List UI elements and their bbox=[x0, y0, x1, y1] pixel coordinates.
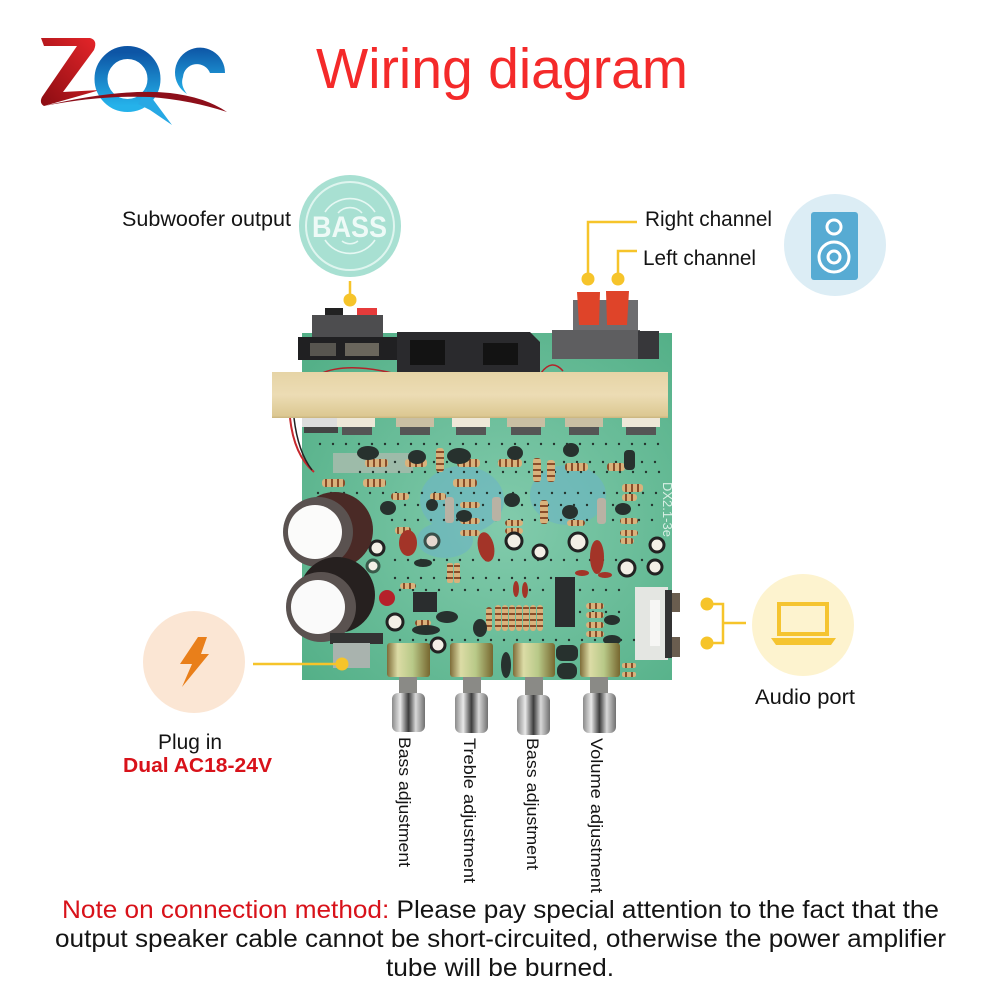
label: audio port: Audio port bbox=[755, 685, 855, 709]
label: bass adjustment 2: Bass adjustment bbox=[523, 738, 542, 870]
resistors bbox=[322, 459, 643, 677]
red film capacitors bbox=[379, 530, 612, 606]
icon: speaker bbox=[784, 194, 886, 296]
right terminal bbox=[552, 291, 659, 359]
potentiometers bbox=[387, 643, 620, 677]
board marking: DX2.1-3e bbox=[660, 482, 675, 537]
icon: bass circle: BASS bbox=[312, 211, 387, 244]
label: right channel: Right channel bbox=[645, 207, 772, 231]
icon: lightning bbox=[143, 611, 245, 713]
power socket bbox=[330, 633, 383, 668]
connector: audio port bbox=[700, 598, 746, 650]
fan bbox=[397, 332, 540, 372]
solder dots bbox=[318, 444, 660, 640]
wires bbox=[290, 365, 563, 472]
small transistors bbox=[357, 443, 635, 679]
connector: left channel bbox=[612, 251, 637, 286]
note text bbox=[55, 896, 946, 982]
subwoofer terminal bbox=[298, 308, 397, 360]
transistors bbox=[302, 418, 660, 435]
label: volume adjustment: Volume adjustment bbox=[587, 738, 606, 893]
small capacitors bbox=[367, 533, 664, 652]
blue zones bbox=[417, 465, 606, 558]
label: left channel: Left channel bbox=[643, 246, 756, 270]
label: treble adjustment: Treble adjustment bbox=[460, 738, 479, 883]
label: plug in: Plug in bbox=[158, 730, 222, 754]
note text: Note on connection method: Please pay special attention to the fact that the bbox=[62, 896, 939, 924]
label: subwoofer output: Subwoofer output bbox=[122, 207, 291, 231]
icon: bass circle bbox=[299, 175, 401, 277]
connector: right channel bbox=[582, 222, 637, 286]
connector: subwoofer bbox=[344, 281, 356, 306]
silkscreen patch bbox=[333, 453, 413, 473]
connector: power bbox=[253, 658, 348, 670]
label: dual AC: Dual AC18-24V bbox=[123, 754, 272, 777]
amplifier board bbox=[272, 291, 680, 735]
chips bbox=[413, 577, 575, 627]
large capacitors bbox=[283, 492, 375, 642]
note text: output speaker cable cannot be short-circuited, otherwise the power amplifier bbox=[55, 925, 946, 953]
icon: laptop bbox=[752, 574, 854, 676]
knobs bbox=[392, 677, 616, 735]
heatsink bbox=[272, 372, 668, 418]
rca socket bbox=[635, 587, 680, 660]
title: Wiring diagram bbox=[316, 37, 688, 101]
note text: tube will be burned. bbox=[386, 954, 614, 982]
logo: ZQC bbox=[41, 38, 227, 125]
label: bass adjustment 1: Bass adjustment bbox=[395, 737, 414, 867]
pcb bbox=[302, 333, 672, 680]
